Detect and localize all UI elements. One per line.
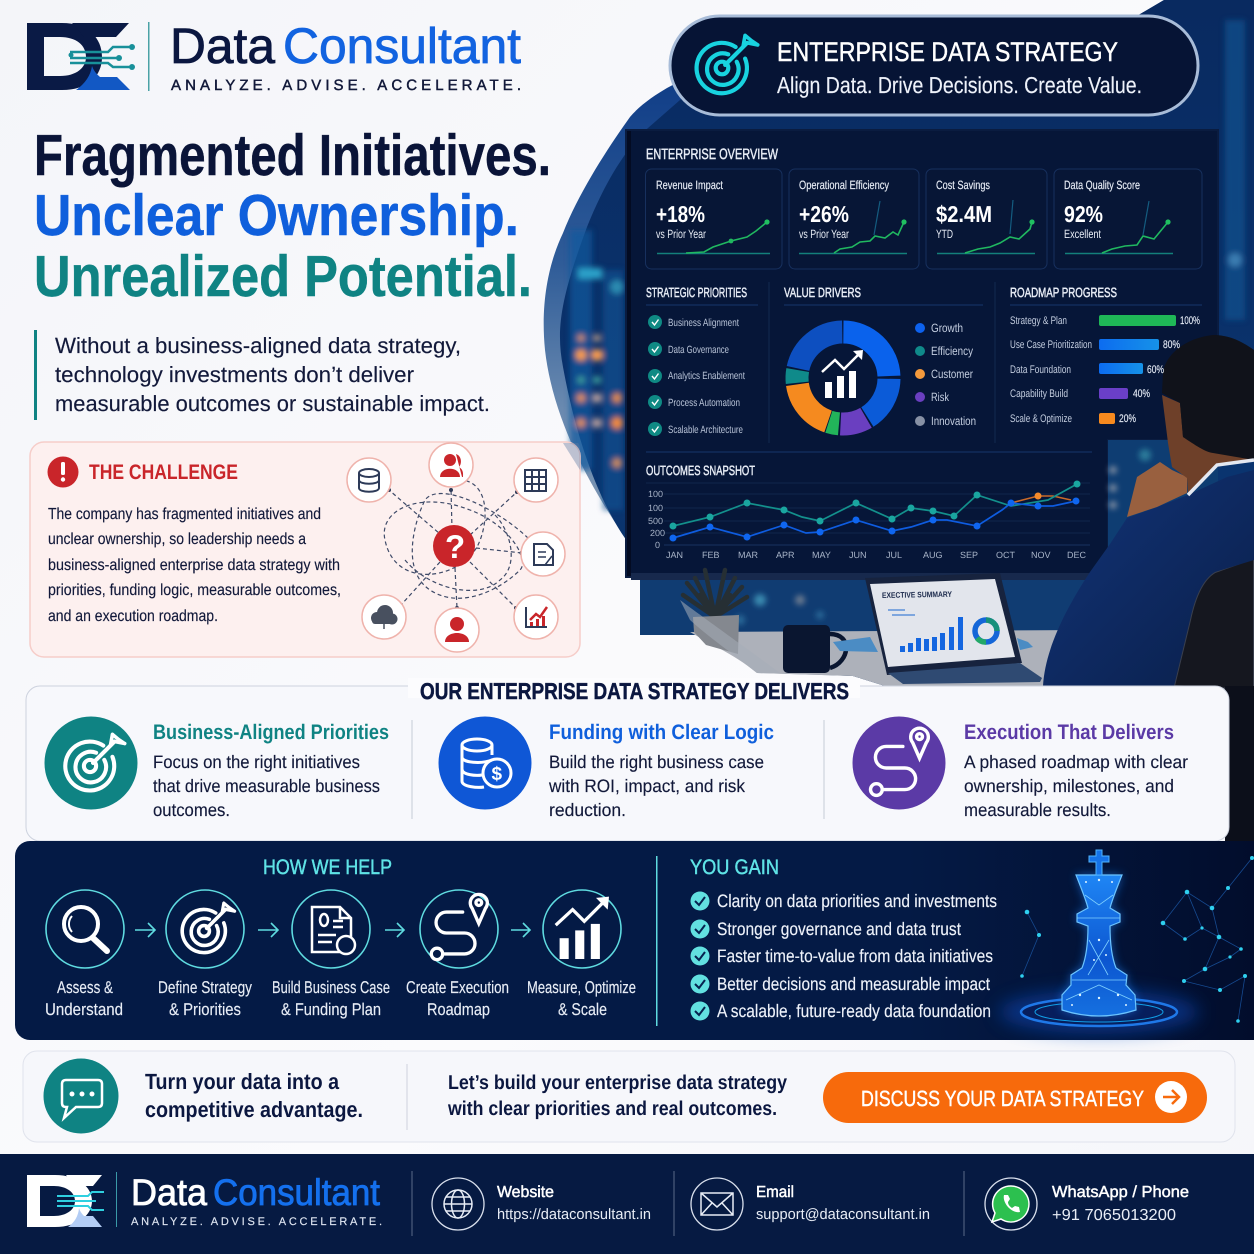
item: execution that delivers — [852, 716, 1188, 820]
item: funding with clear logic — [438, 716, 774, 820]
section: value drivers: Efficiency — [931, 344, 973, 358]
section: outcomes snapshot chart: DEC — [1067, 550, 1087, 560]
panel: call to action: competitive advantage. — [145, 1097, 363, 1122]
process steps — [46, 890, 621, 968]
metric card: data quality score: Excellent — [1064, 227, 1101, 241]
section: roadmap progress: 80% — [1163, 339, 1180, 351]
section: roadmap progress: 40% — [1133, 388, 1150, 400]
challenge text: unclear ownership, so leadership needs a — [48, 531, 306, 548]
section: outcomes snapshot chart: MAR — [738, 550, 758, 560]
icon: route step — [431, 894, 487, 960]
contact: email: support@dataconsultant.in — [756, 1206, 930, 1223]
panel: call to action: Let’s build your enterprise data strategy — [448, 1072, 788, 1094]
section: value drivers: Innovation — [931, 414, 976, 428]
challenge text: The company has fragmented initiatives and — [48, 506, 321, 523]
panel: enterprise data strategy banner: Align Data. Drive Decisions. Create Value. — [777, 72, 1142, 98]
section: outcomes snapshot chart: 200 — [650, 528, 665, 538]
donut chart — [780, 315, 906, 441]
section: strategic priorities — [646, 282, 995, 443]
item: funding with clear logic: Build the right business case — [549, 752, 764, 772]
panel: call to action: Turn your data into a — [145, 1069, 340, 1094]
section: outcomes snapshot chart: JUN — [849, 550, 866, 560]
icon: document — [534, 544, 553, 565]
intro paragraph: technology investments don’t deliver — [55, 362, 414, 387]
headline — [34, 123, 551, 309]
section: outcomes snapshot chart: JUL — [886, 550, 902, 560]
section: outcomes snapshot chart: AUG — [923, 550, 943, 560]
step labels: & Priorities — [169, 1000, 241, 1019]
icon: magnifier — [64, 907, 107, 951]
icon: question: ? — [445, 528, 465, 565]
step labels: Define Strategy — [158, 978, 252, 997]
icon: person red 2 — [445, 617, 469, 642]
challenge text — [48, 506, 341, 625]
step labels: & Scale — [558, 1000, 607, 1019]
headline: Unclear Ownership. — [34, 183, 519, 248]
step labels — [45, 978, 636, 1019]
panel: how we help and you gain — [15, 841, 1254, 1040]
section: roadmap progress: 100% — [1180, 315, 1200, 327]
item: funding with clear logic: reduction. — [549, 800, 626, 820]
metric card: data quality score: 92% — [1064, 201, 1103, 227]
section: outcomes snapshot chart: 0 — [655, 540, 660, 550]
band overlay — [680, 600, 780, 673]
metric card: revenue impact: +18% — [656, 201, 705, 227]
section: outcomes snapshot chart: 100 — [648, 503, 663, 513]
benefits list: Clarity on data priorities and investments — [717, 891, 997, 911]
section: strategic priorities: STRATEGIC PRIORITIES — [646, 285, 747, 300]
intro paragraph: measurable outcomes or sustainable impact. — [55, 391, 490, 416]
logo — [27, 18, 521, 94]
logo: ANALYZE. ADVISE. ACCELERATE. — [171, 77, 521, 94]
metric card: cost savings: Cost Savings — [936, 178, 990, 192]
benefits list: A scalable, future-ready data foundation — [717, 1001, 991, 1021]
contact: email: Email — [756, 1184, 794, 1201]
section: outcomes snapshot chart — [646, 452, 1092, 560]
panel: enterprise overview dashboard — [646, 146, 1202, 560]
item: execution that delivers: A phased roadmap with clear — [964, 752, 1188, 772]
item: business-aligned priorities: that drive measurable business — [153, 776, 380, 796]
laptop: EXECTIVE SUMMARY — [882, 590, 953, 600]
icon: target — [697, 35, 758, 93]
section: value drivers: Customer — [931, 367, 973, 381]
item: funding with clear logic: with ROI, impact, and risk — [548, 776, 746, 796]
icon: chart — [526, 607, 547, 627]
network background — [1020, 856, 1254, 1023]
section: outcomes snapshot chart: 100 — [648, 489, 663, 499]
challenge text: priorities, funding logic, measurable outcomes, — [48, 582, 341, 599]
plant — [683, 570, 747, 654]
section: outcomes snapshot chart: FEB — [702, 550, 720, 560]
item: execution that delivers: Execution That Delivers — [964, 721, 1174, 744]
dashboard scene: office with monitor and consultant — [544, 0, 1254, 841]
footer logo — [27, 1172, 382, 1228]
step labels: Measure, Optimize — [527, 978, 636, 997]
heading: the challenge: THE CHALLENGE — [89, 461, 238, 484]
heading: delivers: OUR ENTERPRISE DATA STRATEGY DELIVERS — [420, 678, 849, 704]
section: value drivers: Risk — [931, 390, 950, 404]
section: roadmap progress: Scale & Optimize — [1010, 413, 1072, 425]
heading: enterprise overview: ENTERPRISE OVERVIEW — [646, 146, 779, 163]
city lights — [570, 20, 1245, 510]
icon: business case document — [312, 907, 355, 954]
metric card: data quality score: Data Quality Score — [1064, 178, 1140, 192]
icon: bars step — [556, 897, 609, 959]
logo: Consultant — [283, 18, 521, 74]
icon: cloud — [371, 605, 398, 629]
metric card: cost savings — [926, 169, 1047, 269]
section: roadmap progress: Strategy & Plan — [1010, 315, 1067, 327]
tangled network diagram — [347, 443, 565, 652]
icon: chat — [44, 1058, 118, 1134]
item: business-aligned priorities: outcomes. — [153, 800, 230, 820]
section: outcomes snapshot chart: 500 — [648, 516, 663, 526]
laptop — [865, 573, 1042, 684]
metric card: revenue impact: vs Prior Year — [656, 227, 706, 241]
section: roadmap progress: 20% — [1119, 413, 1136, 425]
panel: the challenge — [30, 442, 580, 657]
section: roadmap progress: Capability Build — [1010, 388, 1068, 400]
section: outcomes snapshot chart: MAY — [812, 550, 831, 560]
section: outcomes snapshot chart: JAN — [666, 550, 683, 560]
step labels: & Funding Plan — [281, 1000, 381, 1019]
footer logo: Data — [131, 1172, 207, 1213]
item: funding with clear logic: $ — [492, 764, 502, 785]
icon: alert — [48, 456, 78, 488]
section: roadmap progress: Data Foundation — [1010, 364, 1071, 376]
panel: call to action: with clear priorities and real outcomes. — [447, 1098, 777, 1120]
button: discuss your data strategy: DISCUSS YOUR DATA STRATEGY — [861, 1086, 1144, 1111]
challenge text: and an execution roadmap. — [48, 608, 218, 625]
section: value drivers: Growth — [931, 321, 963, 335]
panel: enterprise data strategy banner — [670, 16, 1198, 115]
item: business-aligned priorities — [44, 716, 389, 820]
item: business-aligned priorities: Focus on the right initiatives — [153, 752, 360, 772]
metric card: operational efficiency: vs Prior Year — [799, 227, 849, 241]
step labels: Create Execution — [406, 978, 509, 997]
contact: whatsapp: +91 7065013200 — [1052, 1207, 1176, 1224]
section: outcomes snapshot chart: OCT — [996, 550, 1016, 560]
section: strategic priorities: Analytics Enablement — [668, 370, 745, 382]
section: strategic priorities: Data Governance — [668, 344, 729, 356]
contact: website: https://dataconsultant.in — [497, 1206, 651, 1223]
contact: email — [691, 1178, 930, 1230]
icon: table — [525, 470, 546, 491]
section: roadmap progress: ROADMAP PROGRESS — [1010, 285, 1117, 300]
section: strategic priorities: Business Alignment — [668, 317, 739, 329]
section: strategic priorities: Scalable Architecture — [668, 424, 743, 436]
benefits list: Stronger governance and data trust — [717, 919, 961, 939]
heading: you gain: YOU GAIN — [690, 856, 779, 879]
benefits list — [690, 891, 997, 1021]
challenge text: business-aligned enterprise data strategy with — [48, 557, 340, 574]
window view — [640, 440, 1218, 635]
icon: question — [433, 525, 475, 567]
metric card: operational efficiency — [789, 169, 919, 269]
step labels: Understand — [45, 1000, 123, 1019]
metric card: cost savings: $2.4M — [936, 201, 992, 227]
footer — [0, 1154, 1254, 1254]
benefits list: Faster time-to-value from data initiatives — [717, 946, 993, 966]
mug — [783, 625, 846, 673]
section: roadmap progress — [1010, 285, 1202, 425]
icon: person red — [440, 454, 463, 477]
contact: whatsapp: WhatsApp / Phone — [1052, 1184, 1189, 1201]
contact: whatsapp — [985, 1178, 1189, 1230]
panel: enterprise data strategy banner: ENTERPRISE DATA STRATEGY — [777, 37, 1118, 67]
headline: Fragmented Initiatives. — [34, 123, 551, 188]
logo: Data — [170, 18, 275, 74]
icon: database — [359, 469, 379, 492]
intro paragraph: Without a business-aligned data strategy, — [55, 333, 461, 358]
step labels: Roadmap — [427, 1000, 490, 1019]
section: roadmap progress: Use Case Prioritization — [1010, 339, 1092, 351]
section: outcomes snapshot chart: SEP — [960, 550, 978, 560]
button: discuss your data strategy — [823, 1072, 1207, 1123]
contact: website: Website — [497, 1184, 554, 1201]
section: value drivers: VALUE DRIVERS — [784, 285, 861, 300]
step labels: Build Business Case — [272, 978, 390, 997]
section: outcomes snapshot chart: NOV — [1031, 550, 1051, 560]
section: outcomes snapshot chart: APR — [776, 550, 795, 560]
heading: how we help: HOW WE HELP — [263, 856, 392, 879]
headline: Unrealized Potential. — [34, 244, 532, 309]
footer logo: ANALYZE. ADVISE. ACCELERATE. — [131, 1216, 382, 1228]
metric card: cost savings: YTD — [936, 227, 953, 241]
step labels: Assess & — [57, 978, 114, 997]
metric card: operational efficiency: +26% — [799, 201, 849, 227]
item: execution that delivers: ownership, milestones, and — [964, 776, 1174, 796]
consultant — [1043, 335, 1254, 686]
intro paragraph — [34, 330, 490, 420]
section: strategic priorities: Process Automation — [668, 397, 740, 409]
metric card: revenue impact — [646, 169, 782, 269]
chair — [1174, 558, 1254, 690]
contact: website — [432, 1178, 651, 1230]
icon: database with coin — [462, 739, 511, 787]
icon: target step — [182, 903, 235, 953]
monitor — [626, 130, 1218, 577]
item: execution that delivers: measurable results. — [964, 800, 1111, 820]
metric card: revenue impact: Revenue Impact — [656, 178, 724, 192]
desk — [690, 630, 1090, 686]
panel: our enterprise data strategy delivers — [26, 678, 1229, 841]
item: business-aligned priorities: Business-Aligned Priorities — [153, 721, 389, 744]
chess king with ring — [999, 850, 1199, 1034]
benefits list: Better decisions and measurable impact — [717, 974, 990, 994]
section: outcomes snapshot chart: OUTCOMES SNAPSHOT — [646, 463, 755, 478]
metric card: data quality score — [1054, 169, 1202, 269]
blue tablet — [833, 637, 1033, 652]
footer logo: Consultant — [213, 1172, 381, 1213]
metric card: operational efficiency: Operational Efficiency — [799, 178, 889, 192]
section: roadmap progress: 60% — [1147, 364, 1164, 376]
section: value drivers — [780, 285, 983, 441]
item: funding with clear logic: Funding with Clear Logic — [549, 721, 774, 744]
panel: call to action — [23, 1051, 1235, 1142]
